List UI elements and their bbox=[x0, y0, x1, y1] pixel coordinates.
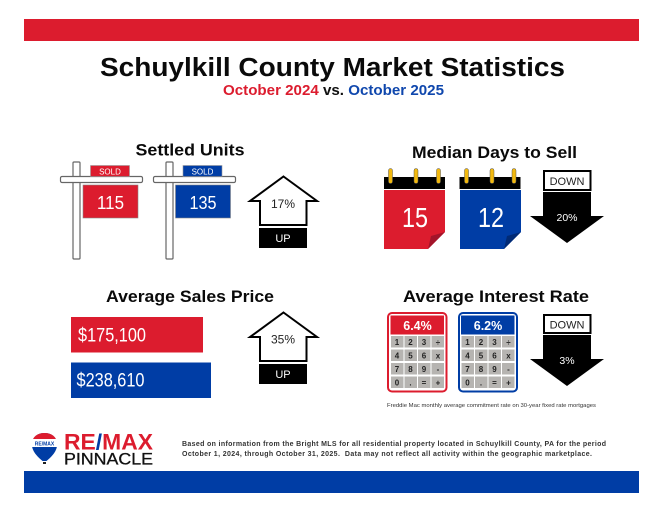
heading: settled units: Settled Units bbox=[136, 140, 244, 160]
arrow: down 3% bbox=[530, 315, 604, 386]
arrow: down 20% bbox=[530, 171, 604, 243]
icon: blue sold sign 135: SOLD bbox=[192, 168, 214, 176]
subtitle: date comparison: October 2024 vs. October 2025 bbox=[223, 83, 444, 99]
icon: red calendar 15: 15 bbox=[402, 202, 428, 233]
bar: October 2024 price bbox=[71, 317, 203, 352]
panel: median days to sell bbox=[384, 143, 604, 249]
bar: October 2025 price bbox=[71, 362, 211, 398]
icon: blue calculator 6.2%: - bbox=[507, 365, 510, 374]
bar: October 2025 price: $238,610 bbox=[76, 370, 144, 392]
icon: red calculator 6.4%: ÷ bbox=[436, 338, 441, 347]
disclaimer text: October 1, 2024, through October 31, 2025. Data may not reflect all activity within the geographic marketplace. bbox=[182, 451, 592, 458]
icon: red calculator 6.4%: 4 bbox=[395, 351, 400, 360]
icon: blue calculator 6.2%: ÷ bbox=[506, 338, 511, 347]
icon: red calculator 6.4%: 7 bbox=[395, 365, 400, 374]
icon: red sold sign 115 bbox=[60, 162, 142, 259]
arrow: down 20%: DOWN bbox=[550, 176, 584, 188]
icon: blue calculator 6.2%: 2 bbox=[479, 338, 484, 347]
icon: red calculator 6.4%: 3 bbox=[422, 338, 427, 347]
icon: blue calendar 12: 12 bbox=[478, 202, 504, 233]
heading: average sales price: Average Sales Price bbox=[106, 287, 274, 306]
icon: red calculator 6.4%: - bbox=[437, 365, 440, 374]
top red banner bbox=[24, 19, 639, 41]
bar: October 2024 price: $175,100 bbox=[78, 326, 146, 346]
icon: red calculator 6.4%: 6.4% bbox=[403, 319, 432, 333]
icon: blue calculator 6.2%: 1 bbox=[465, 338, 470, 347]
arrow: down 3%: 3% bbox=[559, 355, 575, 367]
arrow: up 17%: 17% bbox=[271, 197, 295, 211]
disclaimer text: Based on information from the Bright MLS for all residential property located in Schuylkill County, PA for the period bbox=[182, 441, 606, 448]
icon: blue calculator 6.2%: + bbox=[506, 378, 511, 387]
arrow: down 20%: 20% bbox=[556, 212, 578, 224]
icon: red calculator 6.4%: 9 bbox=[422, 365, 427, 374]
heading: average interest rate: Average Interest Rate bbox=[403, 287, 589, 306]
icon: red calculator 6.4%: 6 bbox=[422, 351, 427, 360]
icon: blue calculator 6.2%: x bbox=[506, 351, 511, 360]
disclaimer text bbox=[182, 441, 606, 458]
title: Schuylkill County Market Statistics bbox=[100, 54, 565, 82]
wordmark: Pinnacle: PINNACLE bbox=[64, 450, 153, 468]
icon: blue calculator 6.2%: 0 bbox=[465, 378, 470, 387]
arrow: up 35% bbox=[250, 312, 317, 384]
panel: settled units bbox=[60, 140, 317, 259]
icon: red sold sign 115: SOLD bbox=[99, 168, 121, 176]
icon: red calculator 6.4%: + bbox=[436, 378, 441, 387]
heading: median days to sell: Median Days to Sell bbox=[412, 143, 577, 162]
icon: red calculator 6.4% bbox=[388, 313, 446, 392]
panel: average interest rate bbox=[387, 287, 604, 409]
icon: blue sold sign 135 bbox=[154, 162, 236, 259]
icon: blue calculator 6.2%: 6 bbox=[492, 351, 497, 360]
icon: blue calculator 6.2%: 7 bbox=[465, 365, 470, 374]
icon: red calculator 6.4%: = bbox=[422, 378, 427, 387]
icon: red calculator 6.4%: 0 bbox=[395, 378, 400, 387]
icon: blue calculator 6.2%: 4 bbox=[465, 351, 470, 360]
icon: blue calculator 6.2%: . bbox=[480, 378, 482, 387]
icon: red calculator 6.4%: 5 bbox=[408, 351, 413, 360]
bottom blue banner bbox=[24, 471, 639, 493]
icon: blue calculator 6.2%: = bbox=[492, 378, 497, 387]
icon: red calculator 6.4%: x bbox=[436, 351, 441, 360]
icon: red calendar 15 bbox=[384, 168, 445, 249]
icon: blue calculator 6.2% bbox=[459, 313, 517, 392]
arrow: down 3%: DOWN bbox=[550, 320, 584, 332]
icon: blue calculator 6.2%: 3 bbox=[492, 338, 497, 347]
arrow: up 17% bbox=[250, 176, 317, 248]
icon: red calculator 6.4%: 8 bbox=[408, 365, 413, 374]
icon: blue calculator 6.2%: 9 bbox=[492, 365, 497, 374]
icon: red calculator 6.4%: . bbox=[409, 378, 412, 387]
arrow: up 35%: UP bbox=[275, 369, 291, 381]
icon: blue sold sign 135: 135 bbox=[190, 192, 216, 213]
icon: red calculator 6.4%: 1 bbox=[395, 338, 400, 347]
icon: blue calendar 12 bbox=[460, 168, 521, 249]
footnote: rate source: Freddie Mac monthly average commitment rate on 30-year fixed rate mortgages bbox=[387, 403, 596, 409]
icon: blue calculator 6.2%: 6.2% bbox=[474, 319, 502, 333]
icon: red calculator 6.4%: 2 bbox=[408, 338, 413, 347]
icon: balloon: RE/MAX bbox=[35, 442, 55, 448]
icon: blue calculator 6.2%: 8 bbox=[479, 365, 484, 374]
logo: RE/MAX Pinnacle bbox=[32, 430, 153, 468]
panel: average sales price bbox=[71, 287, 317, 398]
wordmark: RE/MAX: RE/MAX bbox=[64, 430, 153, 454]
icon: blue calculator 6.2%: 5 bbox=[479, 351, 484, 360]
arrow: up 35%: 35% bbox=[271, 332, 295, 346]
arrow: up 17%: UP bbox=[275, 233, 291, 245]
icon: red sold sign 115: 115 bbox=[97, 192, 124, 213]
